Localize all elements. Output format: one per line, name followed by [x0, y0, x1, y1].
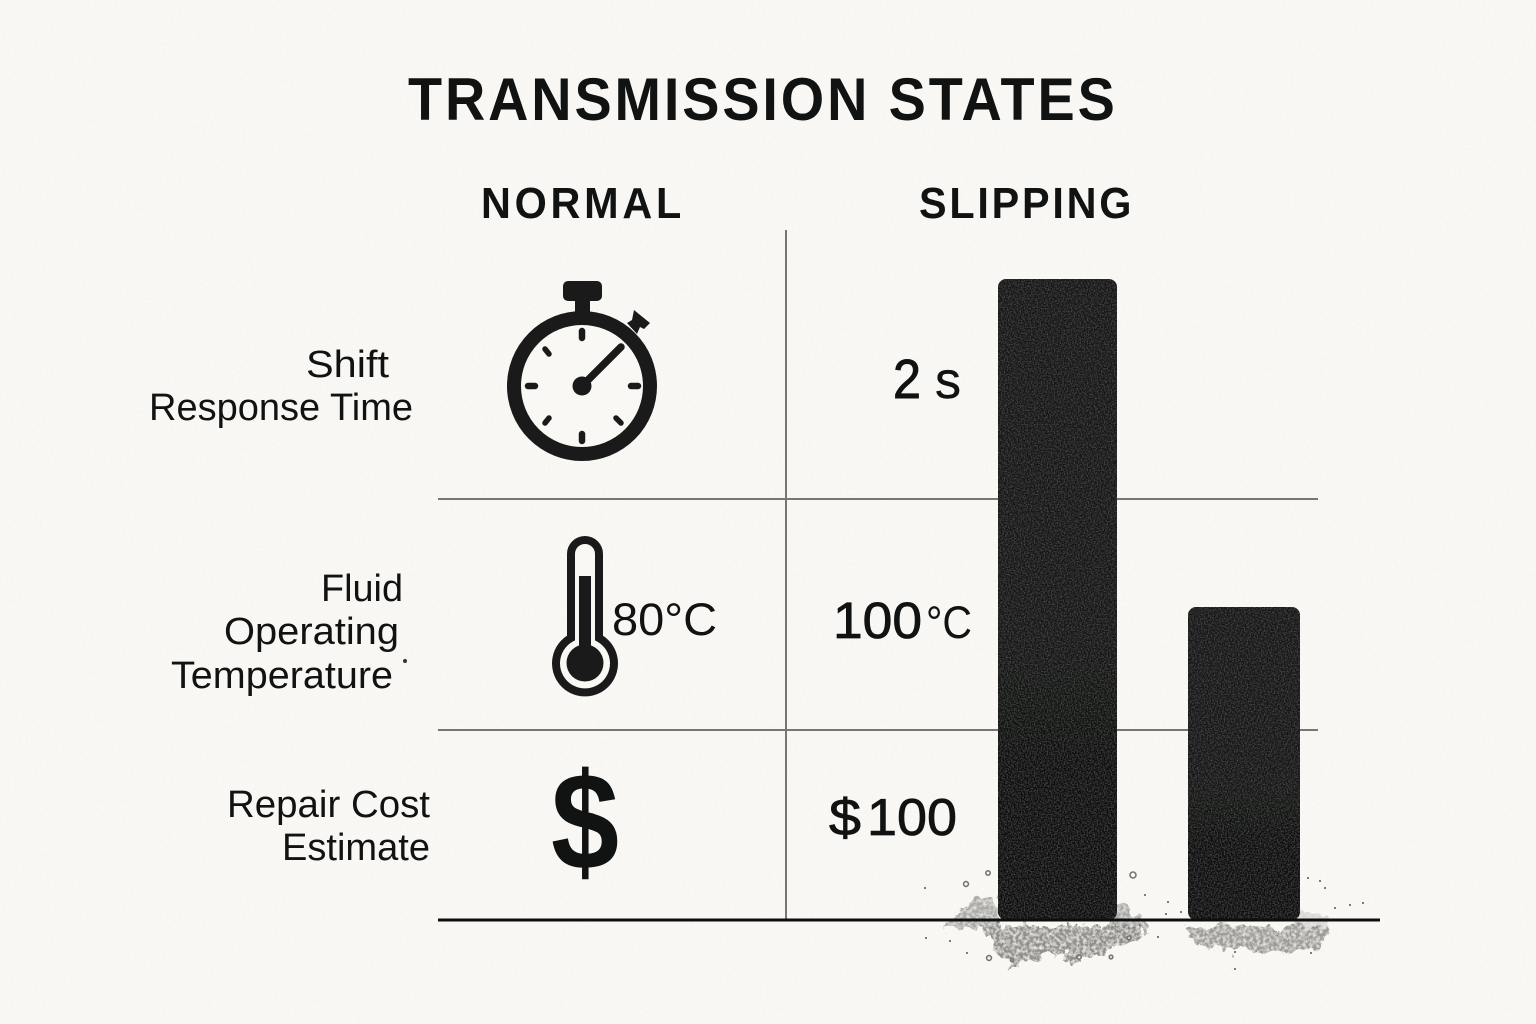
title: TRANSMISSION STATES	[408, 67, 1115, 133]
value: slipping shift time: 2	[893, 348, 921, 410]
table grid lines	[438, 230, 1318, 919]
value: slipping temperature: °C	[926, 597, 972, 648]
splatter rings and specks	[924, 871, 1364, 970]
row label: shift response time: Response Time	[149, 387, 413, 429]
row label: repair cost estimate	[227, 784, 430, 869]
column heading: slipping: SLIPPING	[919, 179, 1131, 228]
value: slipping temperature: 100	[833, 592, 922, 649]
bar: normal state, tall	[998, 279, 1117, 920]
icon: thermometer	[556, 540, 614, 692]
value: slipping repair cost: 100	[867, 789, 957, 847]
value: slipping shift time: s	[935, 352, 961, 410]
icon: dollar sign: $	[551, 745, 619, 899]
row label: repair cost estimate: Estimate	[282, 827, 430, 869]
row label: fluid operating temperature	[171, 568, 407, 697]
bar: slipping state, short	[1188, 607, 1300, 920]
value: slipping repair cost: $	[829, 789, 861, 847]
row label: fluid operating temperature: Operating	[224, 611, 399, 653]
value: slipping temperature	[833, 592, 972, 649]
chart baseline	[438, 918, 1380, 922]
column heading: normal: NORMAL	[481, 179, 681, 228]
row label: fluid operating temperature: Fluid	[321, 568, 403, 610]
ink splatter behind bars	[924, 871, 1364, 970]
row label: repair cost estimate: Repair Cost	[227, 784, 430, 826]
value: slipping repair cost	[829, 789, 957, 847]
row label: fluid operating temperature: Temperature	[171, 655, 393, 697]
value: normal temperature: 80°C	[612, 594, 717, 645]
row label: shift response time	[149, 344, 413, 429]
value: slipping shift time	[893, 348, 961, 410]
row label: shift response time: Shift	[306, 344, 389, 386]
icon: stopwatch	[514, 281, 650, 454]
